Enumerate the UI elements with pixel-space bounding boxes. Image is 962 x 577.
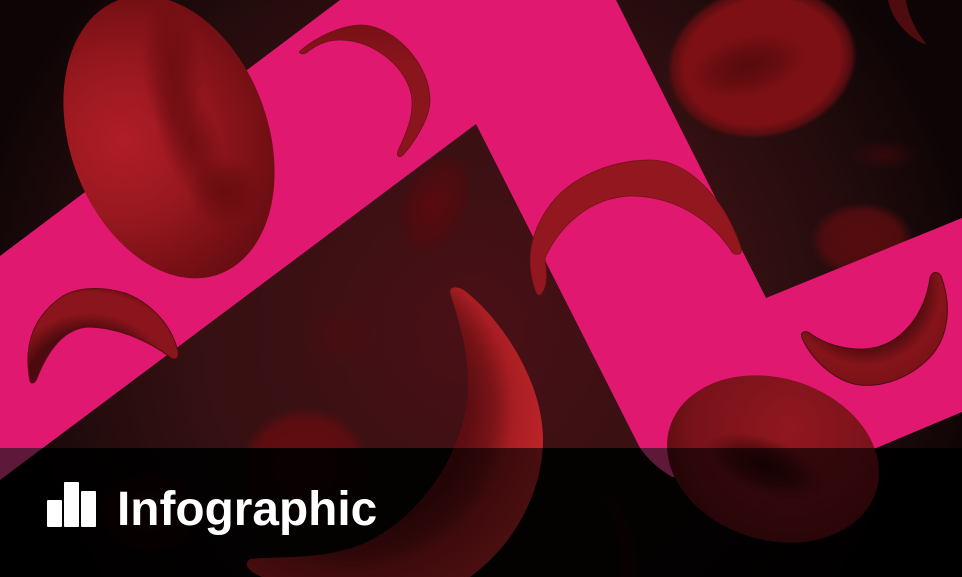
sickle cell top bbox=[299, 25, 430, 157]
icon: bar chart bbox=[47, 482, 96, 527]
dark title bar bbox=[0, 448, 962, 577]
sickle cell left bbox=[28, 289, 178, 383]
darkening of background beneath the bar bbox=[0, 448, 962, 577]
sickle cell right bbox=[802, 272, 947, 385]
sickle cell centre bbox=[530, 160, 741, 295]
red blood cell bottom right bbox=[667, 375, 879, 543]
red blood cell top left bbox=[63, 0, 275, 278]
title: Infographic bbox=[117, 483, 377, 536]
large sickle cell bbox=[247, 287, 543, 577]
